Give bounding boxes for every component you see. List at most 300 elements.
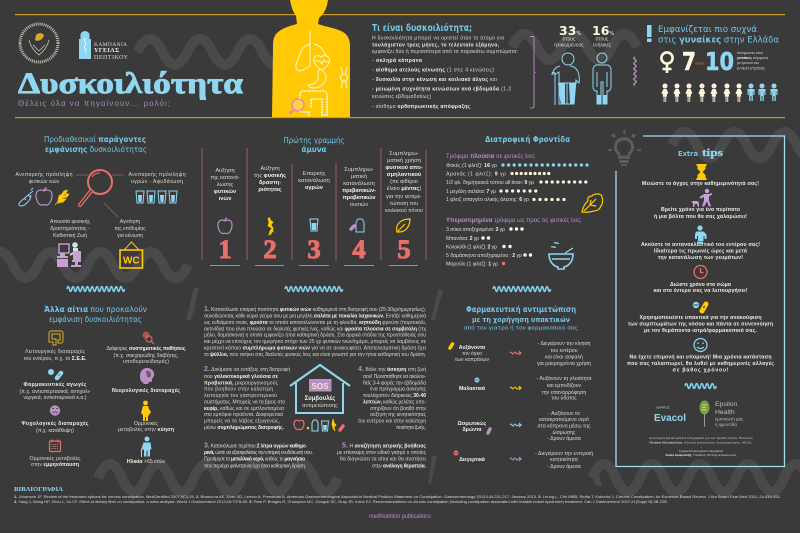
column 2: δραστη- (259, 180, 281, 186)
advice 2: λειτουργία του γαστρεντερικού (204, 392, 277, 399)
sponsor: Evacol: Evacol (654, 413, 686, 424)
row: osmotic: - Δρουν άμεσα (547, 435, 581, 442)
advice 2: μέσω συμπληρώματος διατροφής. (204, 424, 285, 431)
icon: pill and carton (351, 219, 364, 232)
row: stimulants (454, 450, 593, 470)
fibre-rich foods list: 1/2 φλ. δημητριακά τύπου all bran: 9 γρ (446, 179, 534, 186)
heading: Διατροφική Φροντίδα (485, 135, 570, 144)
factor: low fluid intake: Ανεπαρκής πρόσληψη (128, 171, 186, 178)
advice 2 (204, 366, 290, 431)
advice 4: θείς 3-4 φορές την εβδομάδα (363, 380, 426, 386)
stat: 33% elderly: στους (563, 36, 576, 42)
advice 1 (204, 306, 427, 358)
cause: psychological: (π.χ. κατάθλιψη) (36, 427, 74, 434)
column 3: υγρών (305, 185, 323, 191)
advice 2: κεφίρ, καθώς και σε εμπλουτισμένα (204, 405, 284, 412)
row: osmotic (458, 410, 591, 442)
row: bulk-forming: για μακροχρόνια χρήση (537, 360, 591, 367)
row: softeners: του ύδατος (551, 396, 577, 402)
logo: health campaign bottle (79, 31, 129, 61)
advice 5: 5. Η αναζήτηση ιατρικής βοήθειας (342, 442, 426, 450)
tip: be patient: Να έχετε επιμονή και υπομονή! Μια χρόνια κατάσταση (630, 354, 772, 360)
icon: elderly man (552, 53, 579, 105)
body illustration (272, 0, 350, 117)
references: 1. Johanson JF. Review of the treatment options for chronic constipation. MedGenMed 2007;9(2):25. 2. Bharucha AE, Dorn SD, Lembo A, Pressman A. American Gastroenterological Association Medical Position Statement on Constipation. Gastroenterology 2013;144:211-217, January 2013. 3. Leung L, Chir MBB, Riutta T, Kotecha J. Chronic Constipation: An Evidence-Based Review. J Am Board Fam Med 2011; 24:436-451. (14, 495, 781, 499)
symptoms list (372, 58, 511, 110)
icon: SOS house: Συμβουλές (305, 396, 335, 402)
symptoms list: ▪ αίσθημα ατελούς κένωσης (1 στις 4 κενώσεις) (372, 66, 494, 74)
cause: menopause (30, 440, 81, 468)
column 5: σμηλαντικού (387, 172, 422, 178)
number 2: 2 (263, 234, 277, 264)
icon: WC sign: WC (123, 256, 140, 266)
heading: Άλλα αίτια που προκαλούν (44, 305, 147, 314)
organs (296, 31, 348, 116)
references (14, 495, 781, 504)
heading: ΒΙΒΛΙΟΓΡΑΦΙΑ (14, 486, 63, 493)
advice 4: στηρίζουν ότι βοηθά στην (370, 405, 426, 412)
column 4: προβιοτικών (342, 195, 376, 201)
column 5: ματική χρήση (387, 157, 421, 164)
advice 4: 4. Βάλε την άσκηση στη ζωή (358, 366, 426, 373)
factor: ignoring the urge: της επιθυμίας (114, 226, 146, 232)
panel: dietary care (446, 135, 603, 269)
heading: άμυνα (302, 145, 326, 154)
tip: laxatives (628, 302, 773, 334)
row: bulk-forming: του εντέρου (550, 347, 578, 354)
scientific credits: Επιστημονική Επιμέλεια Infographic για τον Ομάδα Υγείας Πεπτικού (650, 436, 753, 440)
panel: more frequent in women (647, 25, 779, 102)
icon: SOS house (290, 365, 350, 431)
brace (530, 36, 535, 108)
icon: soup bowl (549, 243, 573, 269)
heading: στις γυναίκες στην Ελλάδα (658, 34, 779, 46)
column 5: κοιλιακού πόνου (385, 207, 423, 214)
panel: other causes (20, 305, 186, 468)
icon: hourglass (696, 164, 706, 180)
heading (44, 135, 147, 154)
sponsor: Epsilon Health: η φροντίδα (715, 422, 737, 427)
row: softeners: - Αυξάνουν τη γλοιότητα (537, 375, 591, 382)
sponsor: Epsilon Health: Health (715, 409, 735, 416)
row: osmotic: κατακρατούμενο νερό (539, 416, 589, 423)
advice 1: 1. Κατανάλωσε επαρκή ποσότητα φυτικών ινών καθημερινά στη διατροφή σου (25-30γρ/ημερησίως), (204, 306, 426, 313)
row: stimulants: κινητικότητα (550, 456, 578, 463)
sponsor: Epsilon Health (700, 400, 744, 427)
advice 4: αύξηση της κινητικότητας (370, 411, 427, 418)
heading: Extra (678, 150, 698, 158)
cause: medication (20, 369, 91, 401)
row: osmotic: - Αυξάνουν το (548, 410, 580, 417)
tip: listen to bowel reflex (641, 225, 760, 261)
row: bulk-forming (450, 341, 591, 367)
column 3: Επαρκής (303, 170, 326, 177)
icon: dancer (268, 218, 273, 235)
overestimated foods list: 3 σύκα αποξηραμένα: 3 γρ (446, 226, 505, 233)
icon: apple (218, 218, 232, 234)
cause: systemic diseases (106, 332, 186, 365)
row: bulk-forming: τον όγκο (462, 350, 482, 357)
panel: management advice (204, 306, 427, 470)
logo: Hellenic foundation seal (19, 24, 59, 62)
heading: Φαρμακευτική αντιμετώπιση (466, 305, 576, 314)
icon: SOS house: αντιμετώπισης (302, 402, 338, 409)
number 1: 1 (218, 234, 232, 264)
icon: glass (310, 219, 318, 231)
advice 2: που βοηθούν στην καλύτερη (204, 386, 273, 392)
panel: extra tips (608, 130, 784, 466)
fibre-rich foods list: Φακές (1 φλιτζ): 16 γρ (446, 162, 497, 169)
bibliography (14, 486, 781, 520)
advice 1: ακτινίδια) που είναι πλούσια σε διαλυτές φυτικές ίνες, καθώς και φρούτα πλούσια σε σορβιτόλη (πχ (204, 326, 426, 332)
panel: pharmaceutical treatment (450, 305, 593, 470)
number 3: 3 (307, 234, 321, 264)
icon: light bulb (608, 130, 641, 166)
cause: systemic diseases: υποθυρεοειδισμός) (123, 358, 169, 365)
arrow (510, 386, 521, 390)
cause: functional bowel: Λειτουργικές διαταραχές (25, 348, 85, 355)
icon: clock (694, 266, 707, 278)
advice 2: σου γαλακτοκομικά γλούσια σε (204, 374, 279, 380)
definition text: τουλάχιστον τρεις μήνες, το τελευταίο εξάμηνο, (372, 42, 500, 48)
subtitle: Θέλεις όλα να πηγαίνουν... ρολόι; (18, 99, 170, 108)
column 4 (342, 167, 376, 266)
advice 4: σου! Προσπάθησε να ακολου- (363, 373, 426, 380)
stat: 7 out of 10: 7 (682, 47, 696, 76)
tip: laxatives: Χρησιμοποιείστε υπακτικά για την ανακούφιση (640, 315, 762, 321)
overestimated foods list: Μαρούλι (1 φλιτζ): 1 γρ (446, 262, 498, 268)
stat: 16% adults (592, 23, 614, 48)
advice 3: ρινά, ώστε να εξασφαλίσεις την επαρκή ενυδάτωσή σου. (204, 449, 313, 456)
tip: make time for a walk: Βρείτε χρόνο για ένα περίπατο (661, 207, 740, 213)
heading (464, 305, 578, 332)
factor: physical inactivity: δραστηριότητας - (50, 225, 90, 232)
cause: pregnancy: μεταβολές στην κύηση (118, 426, 174, 433)
tip: laxatives: με τον θεράποντα ιατρό/φαρμακοποιό σας. (644, 328, 758, 334)
stat source text: γυναίκες σύμφωνα (737, 56, 768, 60)
advice 1: και μέχρι να επιτύχεις τον ημερήσιο στόχο των 25 γρ φυτικών ινών/ημέρα, μπορείς να λαμβάνεις σε (204, 338, 427, 345)
panel: what is constipation (372, 22, 518, 110)
sponsor: Evacol: ΧΟΡΗΓΟΣ: (656, 406, 670, 410)
cause: medication: Φαρμακευτικές αγωγές (24, 382, 87, 388)
factor: low fluid intake: υγρών - Αφυδάτωση (131, 178, 183, 185)
tip: listen to bowel reflex: την κατανάλωση των γευμάτων! (658, 255, 743, 261)
definition text: εμφανίζει δύο ή περισσότερα από τα παρακάτω συμπτώματα: (372, 48, 518, 55)
publisher: medNutrition publications (369, 514, 431, 520)
stats: elderly and adults (552, 23, 614, 105)
silhouette (272, 0, 350, 117)
row: osmotic: ώσμωσης (553, 430, 576, 436)
sponsor: Epsilon Health: έμπνευσή μας (715, 416, 744, 422)
logo: health campaign bottle: ΠΕΠΤΙΚΟΥ (94, 55, 129, 61)
advice 5: με επίσκεψη στον ειδικό γιατρό ο οποίος (337, 449, 427, 456)
row: bulk-forming: Αυξάνοντα (459, 345, 486, 351)
row: stimulants: Διεγερτικά (459, 457, 486, 463)
arrow (510, 457, 521, 461)
advice 4: του εντέρου και στην καλύτερη (358, 418, 426, 424)
scientific credits: - (700, 445, 702, 449)
heading: Τι είναι δυσκοιλιότητα; (372, 22, 472, 34)
heading: από τον γιατρό ή τον φαρμακοποιό σας (464, 324, 578, 332)
icon: carrot (19, 188, 33, 206)
factor: low fluid intake (128, 171, 186, 203)
cause: pregnancy: Ορμονικές (134, 420, 159, 427)
cause: neurological (112, 368, 180, 394)
factor: physical inactivity: Καθιστική Ζωή (53, 232, 87, 239)
stat: 16% adults: στους (596, 36, 609, 42)
column 2: της φυσικής (254, 173, 286, 179)
column 4: κατανάλωση (343, 180, 375, 187)
icon: SOS house: SOS (312, 382, 329, 391)
cause: psychological: Ψυχολογικές διαταραχές (22, 421, 89, 427)
column 1: λωσης (217, 182, 234, 188)
heading (284, 136, 344, 154)
heading: με τη χορήγηση υπακτικών (472, 316, 570, 324)
symptoms list: ▪ δυσκολία στην κένωση και κοιλιακό άλγος και (372, 77, 497, 83)
symptoms list: κενώσεις εβδομαδιαίως) (372, 93, 431, 100)
cause: age: Ηλικία >65 ετών (127, 459, 166, 465)
cause: functional bowel (24, 331, 87, 362)
column 1: Αύξηση (215, 167, 235, 174)
advice 3: 3. Κατανάλωσε περίπου 2 λίτρα υγρών καθημε- (204, 442, 307, 450)
column 4: πρεβιοτικών- (342, 188, 376, 194)
icon: adult (593, 53, 611, 104)
cause: medication: νεργικά, αντιισταμινικά κ.α.) (24, 394, 87, 401)
heading: Προδιαθεσικοί παράγοντες (44, 135, 146, 144)
factor: low fibre intake (16, 171, 73, 206)
advice 4: λεπτών, καθώς μελέτες υπο- (363, 398, 426, 406)
tip: reduce stress (642, 164, 759, 187)
symptoms list: ▪ σκληρά κόπρανα (372, 58, 423, 64)
heading: εμφάνισης δυσκοιλιότητας (45, 145, 147, 154)
row: stimulants: - Δρουν άμεσα (547, 463, 581, 470)
advice 1: το ψύλλιο, που ανήκει στις διαλυτές φυτικές ίνες και είναι γνωστό για την ήπια καθαρτική του δράση. (204, 351, 426, 358)
fibre-rich foods subheading: Τρόφιμα πλούσια σε φυτικές ίνες (446, 153, 535, 160)
column 5: Συμπληρω- (389, 151, 419, 157)
column 5: τώπιση του (390, 200, 418, 207)
sponsor: Evacol (654, 406, 686, 424)
advice 2: στο εμπόριο προϊόντα. Διαφορετικά (204, 411, 283, 418)
stat: 33% elderly: ηλικιωμένους (554, 42, 584, 48)
icon: pills (693, 302, 706, 311)
arrow (510, 351, 521, 355)
blue wave centre (285, 286, 343, 292)
row: softeners: και εμποδίζουν (547, 383, 581, 389)
stat: 7 out of 10 (682, 47, 734, 76)
icon: central magnifier (76, 170, 124, 217)
tip: be patient (627, 338, 774, 374)
tip: listen to bowel reflex: Ακούστε το αντανακλαστικό του εντέρου σας! (641, 242, 760, 248)
row: bulk-forming: και είναι ασφαλή (545, 354, 583, 360)
factor: physical inactivity: Απουσία φυσικής (50, 218, 91, 225)
stat: 7 out of 10: στους (695, 62, 705, 66)
cause: systemic diseases: Διάφορες συστηματικές παθήσεις (106, 345, 186, 352)
stat source text: ΕΛΙΕΑΓΕΤ(2006) (737, 66, 765, 70)
cause: pregnancy (118, 401, 174, 433)
column 5: για την αντιμε- (386, 194, 422, 200)
tip: make time for a walk (654, 189, 747, 220)
advice 2: μπορείς να τα λάβεις εξωγενώς, (204, 418, 280, 424)
advice 5: στην ανάλογη θεραπεία. (372, 464, 427, 470)
factor: ignoring the urge (114, 218, 146, 268)
underline (389, 265, 418, 266)
cause: menopause: στην εμμηνόπαυση (31, 462, 79, 468)
stat source text (737, 51, 768, 70)
factor: physical inactivity (50, 218, 91, 267)
number 4: 4 (352, 234, 366, 264)
cause: age (127, 436, 166, 465)
column 3 (298, 170, 330, 266)
advice 4: ποιότητα ζωής. (396, 424, 426, 431)
icon: apple (36, 188, 52, 205)
column 4: ματική (351, 173, 367, 180)
icon: exclamation mark (647, 25, 652, 42)
symptoms list: ▪ αίσθημα ορθοπρωκτικής απόφραξης (372, 104, 470, 110)
definition text (372, 34, 518, 55)
advice 2: συστήματος. Μπορείς να τα βρεις στο (204, 398, 285, 406)
heading: Πρώτης γραμμής (284, 136, 344, 145)
tip: give your body time (654, 266, 748, 294)
gold divider top (15, 14, 785, 15)
advice 3: Προτίμησε το μεταλλικό νερό, καθώς το μαγνήσιο (204, 456, 305, 462)
panel: first line of defence (202, 136, 426, 266)
factor: ignoring the urge: για κένωση (117, 232, 143, 239)
symptoms list: ▪ μειωμένη συχνότητα κενώσεων ανά εβδομάδα (1-2 (372, 86, 511, 92)
cause: neurological: Νευρολογικές διαταραχές (112, 388, 180, 394)
icon row: ten women (661, 84, 778, 102)
dot rows: fibre-rich (499, 163, 589, 201)
header: logos and title (18, 24, 243, 108)
fibre-rich foods list: 1 φλιτζ σπαγγέτι ολικής άλεσης: 6 γρ (446, 196, 529, 203)
stat: 16% adults: 16% (592, 23, 614, 38)
advice 3: που περιέχει φαίνεται να έχει ήπια καθαρτική δράση. (204, 462, 306, 470)
sponsor: Epsilon Health: Epsilon (715, 401, 738, 408)
gold divider bottom (15, 117, 785, 118)
cause: systemic diseases: (π.χ. σακχαρώδης διαβήτης, (114, 352, 178, 359)
advice 4 (358, 366, 427, 431)
column 4: ουσιών (350, 201, 368, 208)
column 5: φυσικού απο- (385, 165, 423, 171)
fibre-rich foods list: Αρακάς (1 φλιτζ): 9 γρ (446, 170, 506, 178)
column 1 (210, 167, 240, 266)
advice 1: συνοδεύοντας κάθε κύριο γεύμα σου με μια μεγάλη σαλάτα με ποικιλία λαχανικών. Εντάξε καθημερινά (204, 312, 426, 320)
logo: health campaign bottle: ΚΑΜΠΑΝΙΑ (94, 42, 127, 48)
row: osmotic: στα κόπρανα μέσω της (538, 422, 591, 430)
stat source text: με έρευνα του (737, 61, 759, 65)
advice 2: 2. Δοκίμασε να εντάξεις στη διατροφή (204, 366, 290, 373)
overestimated foods list: 5 δαμάσκηνα αποξηραμένα : 2 γρ (446, 252, 522, 259)
factor: ignoring the urge: Αγνόηση (120, 218, 140, 225)
advice 3 (204, 442, 313, 470)
fibre-rich foods list (446, 162, 534, 203)
row: osmotic: Ωσμωτικώς (458, 421, 487, 427)
icon row under house (294, 419, 343, 431)
logo: health campaign bottle: ΥΓΕΙΑΣ (94, 48, 119, 54)
tip: laxatives: των συμπτωμάτων της νόσου και πάντα σε συνεννόηση (628, 322, 773, 328)
heading (44, 305, 147, 324)
column 3: κατανάλωση (298, 177, 330, 184)
tip: give your body time: και στο έντερο σας να λειτουργήσει! (654, 288, 748, 294)
column 2: ριότητας (258, 187, 282, 193)
icon: female symbol (661, 52, 673, 73)
arrow (510, 423, 521, 427)
blue wave (685, 384, 716, 388)
fibre-rich foods list: 1 μεγάλη σαλάτα: 7 γρ (446, 188, 496, 195)
cause: medication: (π.χ. αντιυπερτασικά, αντιχολι- (20, 388, 91, 395)
blue wave left (67, 286, 125, 292)
icon: pink magnifier (289, 99, 304, 114)
heading (678, 147, 724, 159)
heading: Εμφανίζεται πιο συχνά (658, 25, 757, 35)
column 2 (254, 165, 286, 266)
column 5 (385, 151, 423, 266)
cause: psychological (22, 405, 89, 434)
column 1: ινών (219, 196, 231, 202)
icon: smiley (694, 338, 707, 352)
overestimated foods subheading: Υπερεκτιμημένα τρόφιμα ως προς τις φυτικές ίνες (446, 217, 581, 224)
icon: leaf (397, 219, 410, 232)
heading: tips (702, 147, 724, 159)
row: softeners: την επαναρρόφηση (542, 389, 586, 396)
scientific credits: Ηλιάνα Ηλιοπούλου, Κλινική Διαιτολόγος-Διατροφολόγος, MCSc. (650, 440, 753, 444)
frame (616, 136, 784, 466)
advice 4: τουλάχιστον διάρκειας 30-40 (363, 392, 426, 399)
underline (255, 265, 284, 266)
tip: be patient: που σας ταλαιπωρεί, θα λυθεί με καθημερινές αλλαγές (627, 361, 774, 367)
tip: listen to bowel reflex: Ιδιαίτερα τις πρωινές ώρες και μετά (654, 248, 748, 254)
row: stimulants: - Διεγείρουν την εντερική (535, 450, 593, 457)
definition text: Η δυσκοιλιότητα μπορεί να οριστεί όταν το άτομο για (372, 34, 504, 42)
tip: reduce stress: Μειώστε το άγχος στην καθημερινότητά σας! (642, 181, 759, 187)
number 5: 5 (397, 234, 411, 264)
tip: be patient: σε βάθος χρόνου! (672, 368, 729, 374)
icon: person walking dog (691, 189, 712, 207)
overestimated foods list: Κολοκύθι (1 φλιτζ): 2 γρ (446, 244, 497, 250)
panel: predisposing factors (16, 135, 186, 268)
column 5: (πε αιθέριο (390, 178, 418, 185)
references: 4. Yang J, Wang HP, Zhou L, Xu CF. Effect of dietary fiber on constipation: a meta analysis. World J Gastroenterol 2012;18:7378-83. 5. Paré P, Bridges R, Champion MC, Ganguli SC, Gray JR, Irvine EJ. Recommendations on chronic constipation (including constipation associated with irritable bowel syndrome) treatment. Can J Gastroenterol 2007;21(Suppl B):3B-22B. (14, 500, 668, 504)
underline (210, 265, 240, 266)
stat: 33% elderly (554, 23, 584, 48)
stat source text: πάσχουσες είναι (737, 51, 763, 55)
advice 4: ένα πρόγραμμα άσκησης (370, 386, 427, 392)
underline (299, 265, 329, 266)
tip: give your body time: Διώστε χρόνο στο σώμα (670, 282, 732, 288)
icon: person (695, 225, 706, 243)
stat: 33% elderly: 33% (559, 23, 581, 38)
column 2: Αύξηση (260, 165, 280, 172)
row: bulk-forming: των κοπράνων (455, 356, 489, 363)
column 4: Συμπληρω- (344, 167, 374, 173)
dot rows: overestimated (481, 227, 532, 265)
underline (344, 265, 374, 266)
advice 1: μήλο, δαμάσκηνα) η οποία εμφανίζει ήπια καθαρτική δράση. Στα αρχικά στάδια της προσπάθειάς σου (204, 332, 426, 338)
scientific credits (650, 436, 753, 457)
factor: low fibre intake: Ανεπαρκής πρόσληψη (16, 171, 73, 178)
row: softeners (459, 375, 591, 402)
advice 1: κρεατινεί κάποιο συμπλήρωμα φυτικών ινών για να σε ανακουφίσει. Αποτελεσματική δράση έχει (204, 344, 426, 352)
purple vertical wave (634, 57, 636, 86)
scientific credits: Σοφία Αραμπατζή, Υπεύθυνη Οπτικής Επικοινωνίας (666, 453, 737, 457)
column 5: έλαιο μέντας) (387, 185, 421, 192)
row: softeners: Μαλακτικά (459, 386, 486, 392)
stat: 7 out of 10: 10 (705, 47, 734, 76)
advice 5: θα διαγνώσει τα αίτια και θα συστήσει (340, 456, 426, 462)
title: Δυσκοιλιότητα (18, 67, 243, 100)
overestimated foods list (446, 226, 522, 268)
stat: 16% adults: ενήλικες (593, 42, 612, 48)
icon: computer desk (57, 242, 81, 267)
